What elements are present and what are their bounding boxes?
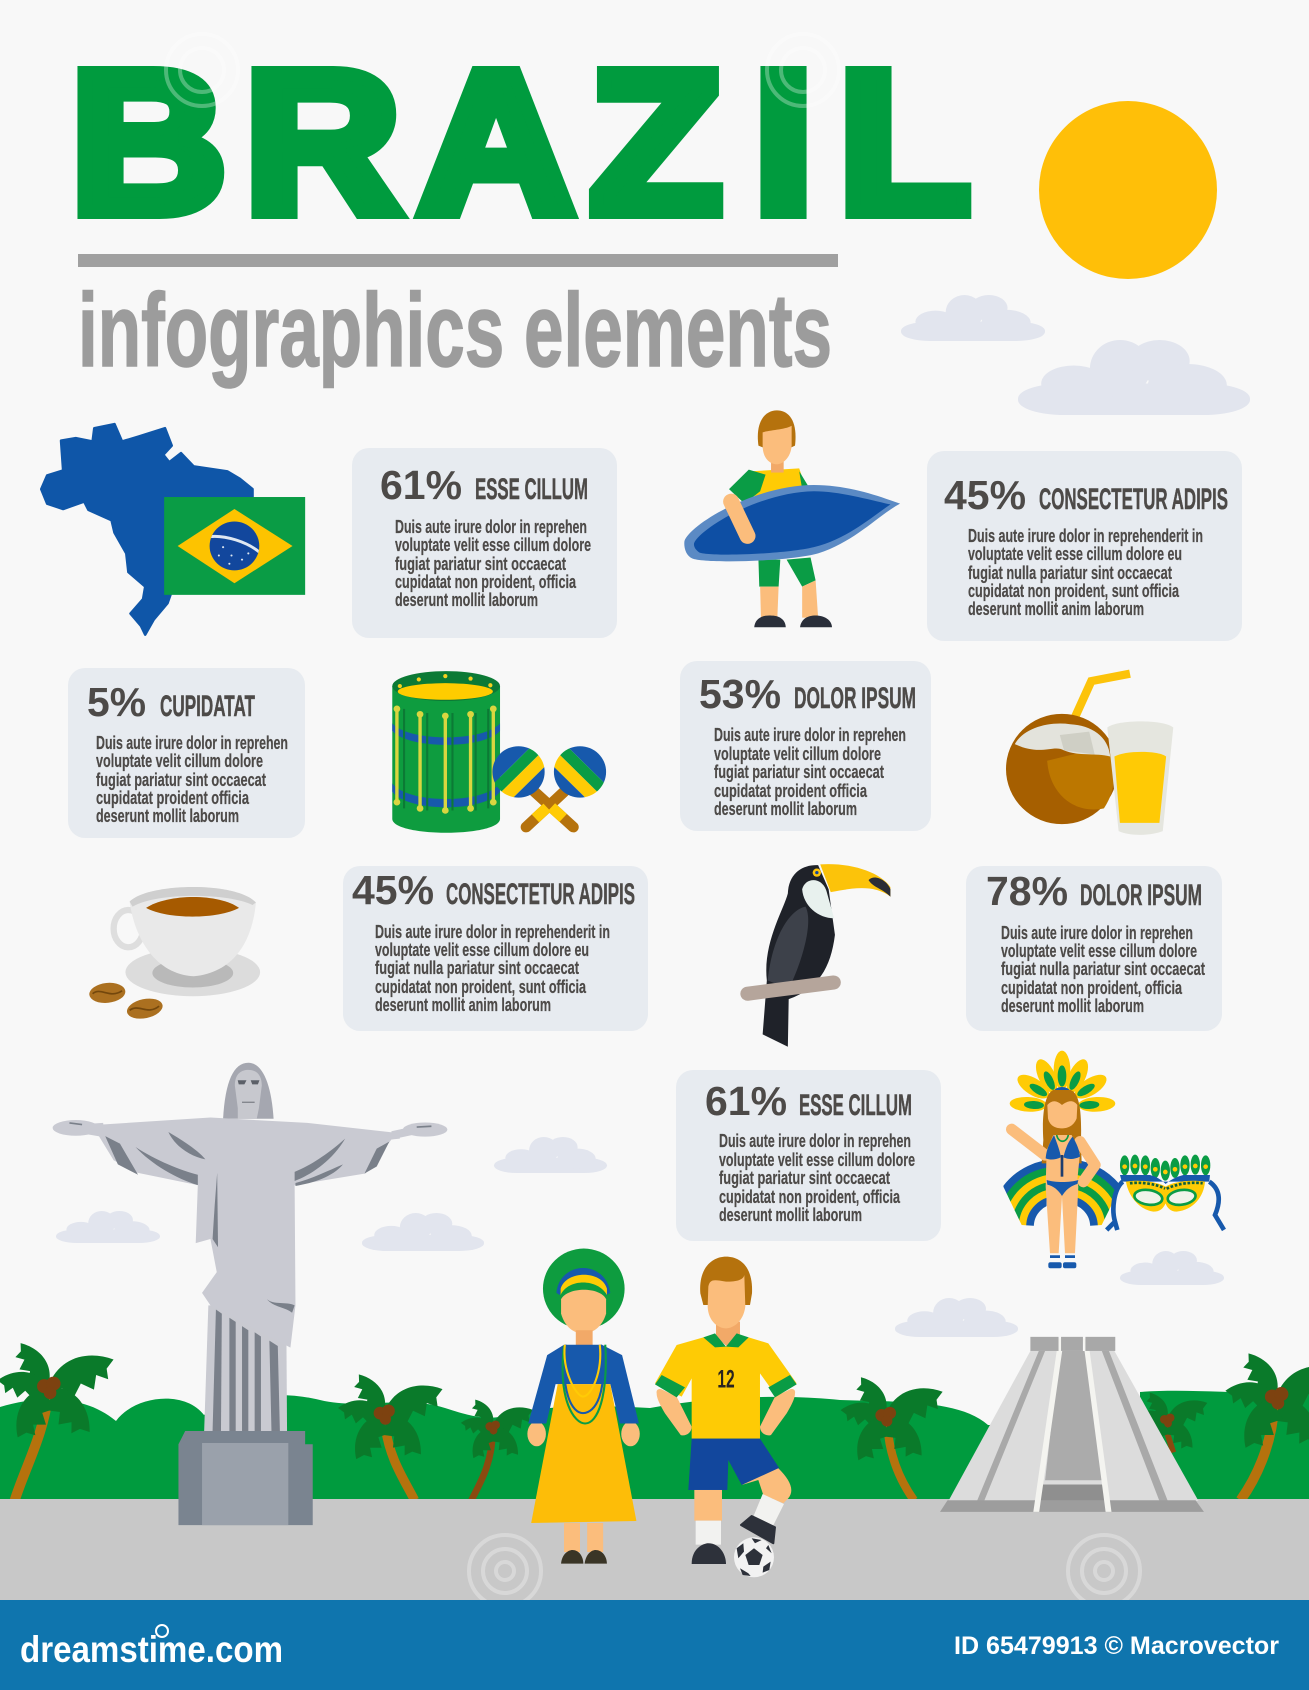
panel: 5% cupidatat: cupidatat proident officia [96, 788, 250, 808]
panel: 78% dolor ipsum: Duis aute irure dolor in reprehen [1001, 923, 1193, 943]
panel: 78% dolor ipsum: 78% [986, 868, 1068, 914]
panel: 45% consectetur adipis (top right) [927, 451, 1242, 641]
panel: 53% dolor ipsum: fugiat pariatur sint occaecat [714, 762, 884, 782]
panel: 45% consectetur adipis (centre left) [343, 866, 648, 1031]
panel: 78% dolor ipsum: voluptate velit esse cillum dolore [1001, 941, 1197, 961]
panel: 78% dolor ipsum: cupidatat non proident, officia [1001, 978, 1183, 998]
watermark spirals [166, 34, 1140, 1607]
panel: 45% consectetur adipis (top right): 45% [944, 472, 1026, 518]
panel: 45% consectetur adipis (top right): cupidatat non proident, sunt officia [968, 581, 1180, 601]
panel: 61% esse cillum (lower): deserunt mollit laborum [719, 1205, 862, 1225]
panel: 5% cupidatat: voluptate velit cillum dolore [96, 751, 263, 771]
panel: 61% esse cillum (lower) [676, 1070, 941, 1241]
panel: 45% consectetur adipis (centre left): fugiat nulla pariatur sint occaecat [375, 958, 579, 978]
footer logo spiral mark [156, 1625, 168, 1637]
panel: 61% esse cillum: ESSE CILLUM [475, 473, 588, 506]
footer bar [0, 1600, 1309, 1690]
panel: 45% consectetur adipis (top right): Duis aute irure dolor in reprehenderit in [968, 526, 1203, 546]
panel: 5% cupidatat: fugiat pariatur sint occaecat [96, 770, 266, 790]
landmark: Brasilia-style pyramid building [940, 1337, 1204, 1512]
panel: 53% dolor ipsum: DOLOR IPSUM [794, 682, 916, 715]
panel: 53% dolor ipsum: 53% [699, 671, 781, 717]
panel: 61% esse cillum [352, 448, 617, 638]
scene background: pavement [0, 1499, 1309, 1600]
panel: 61% esse cillum: voluptate velit esse cillum dolore [395, 535, 591, 555]
panel: 78% dolor ipsum: DOLOR IPSUM [1080, 879, 1202, 912]
panel: 45% consectetur adipis (centre left): deserunt mollit anim laborum [375, 995, 551, 1015]
panel: 53% dolor ipsum: deserunt mollit laborum [714, 799, 857, 819]
icon: coffee cup with beans [88, 887, 260, 1022]
panel: 45% consectetur adipis (centre left): CONSECTETUR ADIPIS [446, 878, 635, 911]
panel: 78% dolor ipsum: fugiat nulla pariatur sint occaecat [1001, 959, 1205, 979]
panel: 61% esse cillum (lower): voluptate velit esse cillum dolore [719, 1150, 915, 1170]
panel: 61% esse cillum (lower): 61% [705, 1078, 787, 1124]
figure: football player number 12 [655, 1257, 797, 1577]
panel: 5% cupidatat: deserunt mollit laborum [96, 806, 239, 826]
clouds lower scene [56, 1137, 1224, 1337]
panel: 61% esse cillum: deserunt mollit laborum [395, 590, 538, 610]
panel: 45% consectetur adipis (top right): voluptate velit esse cillum dolore eu [968, 544, 1182, 564]
palm trees [0, 1340, 1309, 1500]
subtitle: infographics elements: infographics elements [78, 273, 832, 389]
icon: carnival dancer and mask [993, 1051, 1224, 1290]
icon: samba drum and maracas [392, 671, 623, 833]
panel: 53% dolor ipsum [680, 661, 931, 831]
figure: football player number 12: 12 [717, 1367, 735, 1394]
figure: woman in traditional dress [527, 1249, 640, 1564]
icon: coconut drink and juice glass [1006, 674, 1173, 835]
panel: 78% dolor ipsum: deserunt mollit laborum [1001, 996, 1144, 1016]
panel: 61% esse cillum (lower): ESSE CILLUM [799, 1089, 912, 1122]
footer logo: dreamstime.com: dreamstime.com [20, 1629, 283, 1670]
panel: 61% esse cillum: 61% [380, 462, 462, 508]
panel: 53% dolor ipsum: cupidatat proident officia [714, 781, 868, 801]
clouds upper right [901, 295, 1250, 415]
landmark: Christ the Redeemer statue [53, 1063, 447, 1525]
panel: 61% esse cillum: cupidatat non proident, officia [395, 572, 577, 592]
scene background: green hills [0, 1391, 1309, 1499]
icon: sun [1039, 101, 1217, 279]
panel: 53% dolor ipsum: voluptate velit cillum dolore [714, 744, 881, 764]
icon: surfer with board [684, 410, 900, 627]
panel: 5% cupidatat [68, 668, 305, 838]
panel: 45% consectetur adipis (centre left): cupidatat non proident, sunt officia [375, 977, 587, 997]
panel: 45% consectetur adipis (centre left): 45% [352, 867, 434, 913]
panel: 61% esse cillum (lower): fugiat pariatur sint occaecat [719, 1168, 890, 1188]
panel: 45% consectetur adipis (centre left): voluptate velit esse cillum dolore eu [375, 940, 589, 960]
panel: 61% esse cillum: Duis aute irure dolor in reprehen [395, 517, 587, 537]
panel: 61% esse cillum (lower): Duis aute irure dolor in reprehen [719, 1131, 911, 1151]
panel: 53% dolor ipsum: Duis aute irure dolor in reprehen [714, 725, 906, 745]
panel: 45% consectetur adipis (centre left): Duis aute irure dolor in reprehenderit in [375, 922, 610, 942]
panel: 5% cupidatat: 5% [87, 679, 146, 725]
map of Brazil with flag [41, 424, 305, 635]
heading divider bar [78, 254, 838, 267]
icon: toucan on a perch [748, 864, 890, 1047]
panel: 5% cupidatat: Duis aute irure dolor in reprehen [96, 733, 288, 753]
panel: 45% consectetur adipis (top right): deserunt mollit anim laborum [968, 599, 1144, 619]
panel: 61% esse cillum (lower): cupidatat non proident, officia [719, 1187, 901, 1207]
panel: 45% consectetur adipis (top right): fugiat nulla pariatur sint occaecat [968, 563, 1172, 583]
footer credit: image id and author: ID 65479913 © Macrovector [954, 1632, 1279, 1660]
panel: 5% cupidatat: CUPIDATAT [160, 690, 255, 723]
panel: 61% esse cillum: fugiat pariatur sint occaecat [395, 554, 566, 574]
title: BRAZIL: BRAZIL [71, 30, 970, 255]
panel: 78% dolor ipsum [966, 866, 1222, 1031]
